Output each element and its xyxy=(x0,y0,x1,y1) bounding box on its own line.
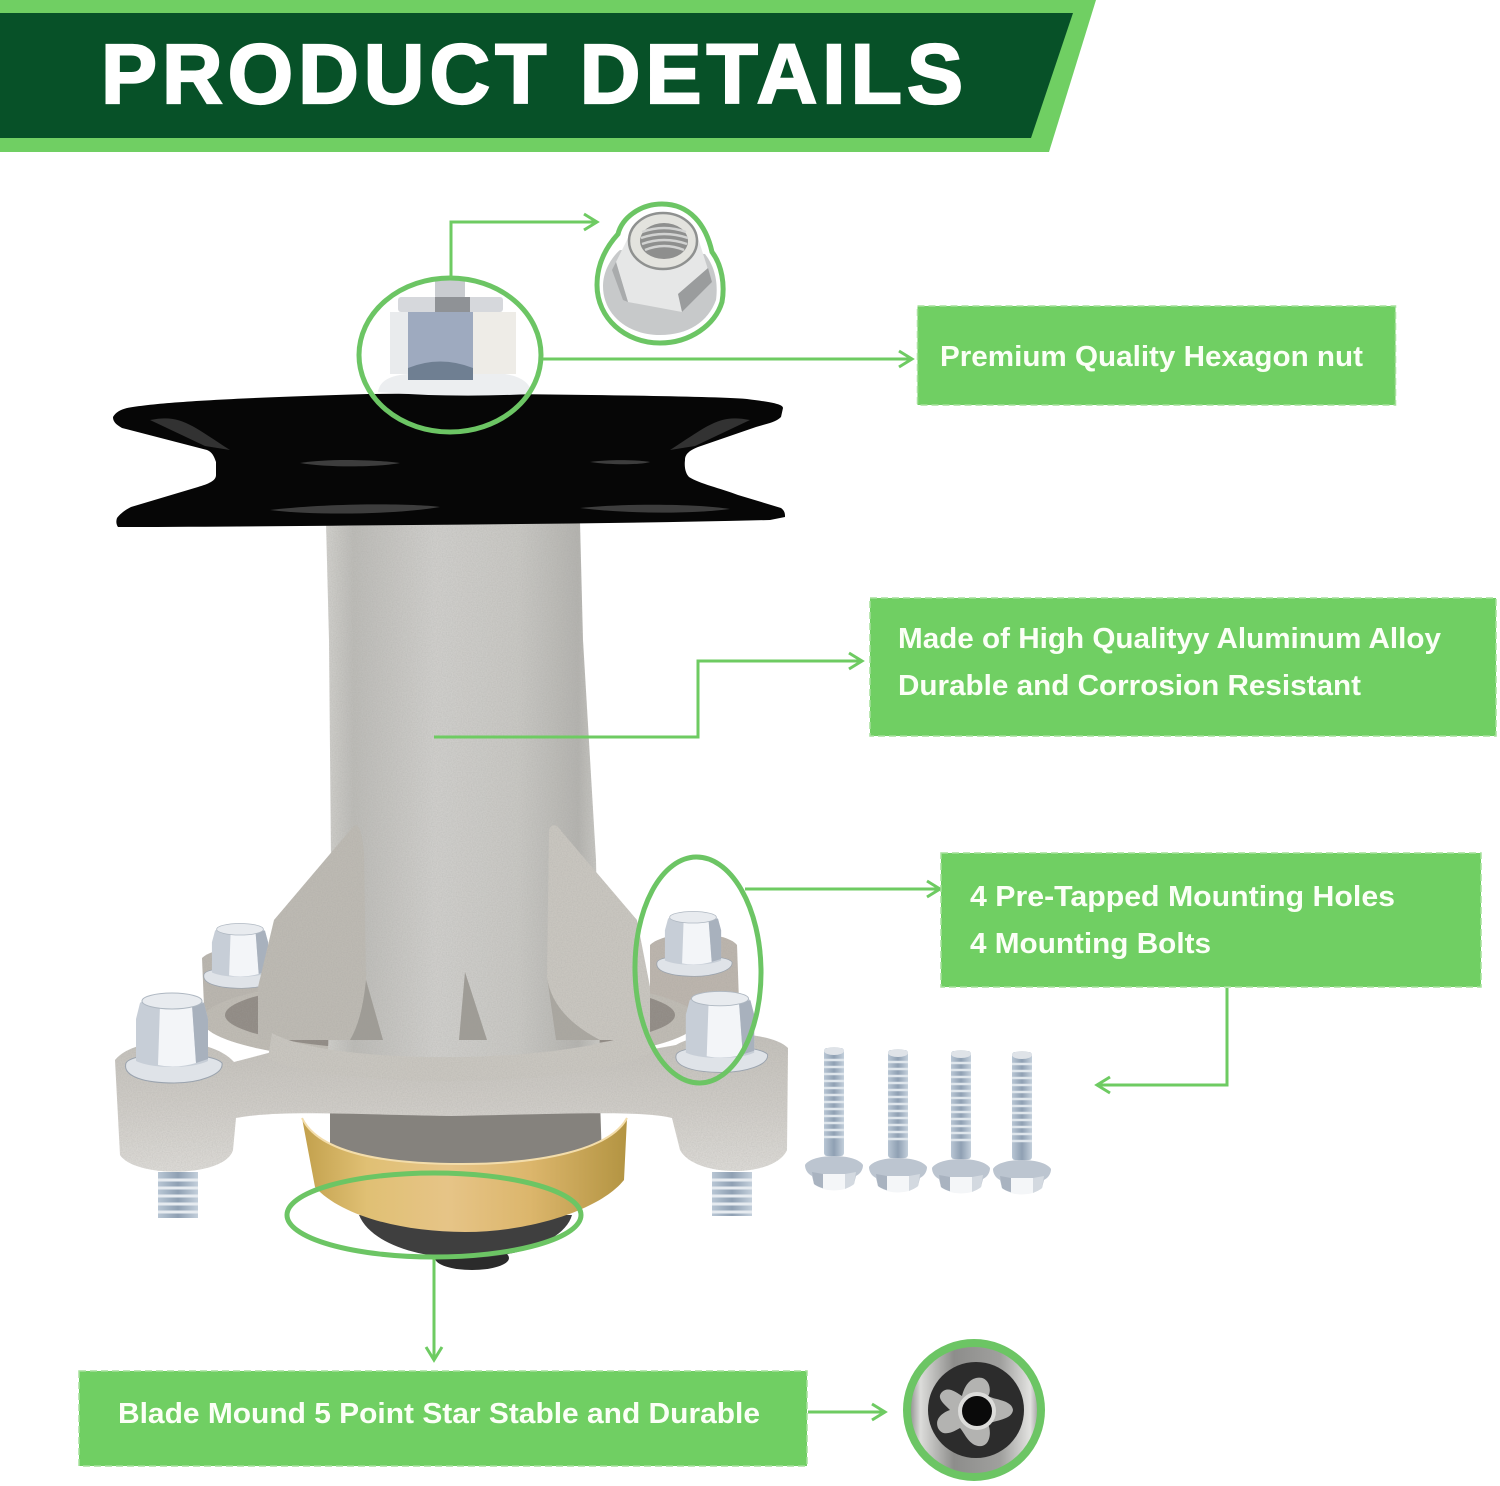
callout: aluminum alloy: Made of High Qualityy Aluminum Alloy xyxy=(898,623,1441,655)
callout: mounting holes xyxy=(941,853,1481,987)
spindle: studs xyxy=(158,1172,752,1218)
spindle: rear bolts xyxy=(204,912,732,988)
star socket xyxy=(937,1378,1013,1446)
arrow: hub nut to thumbnail xyxy=(451,214,597,278)
arrow: shaft to material label xyxy=(434,653,862,737)
highlight ring: hex nut xyxy=(359,278,541,432)
title text: PRODUCT DETAILS xyxy=(101,27,963,121)
arrow: label to star inset xyxy=(808,1404,885,1420)
callout: aluminum alloy xyxy=(870,598,1496,736)
spindle: front bolts xyxy=(126,991,768,1083)
four loose mounting bolts xyxy=(805,1047,1051,1194)
highlight ring: mounting holes xyxy=(633,856,763,1084)
flange nut thumbnail xyxy=(597,204,723,343)
callout: mounting holes: 4 Mounting Bolts xyxy=(970,928,1211,960)
hub nut xyxy=(378,277,532,396)
spindle: mounting base xyxy=(115,1034,788,1172)
spindle: gussets xyxy=(258,825,650,1040)
title banner xyxy=(0,0,1096,152)
callout: hexagon nut xyxy=(918,306,1396,405)
callout: mounting holes: 4 Pre-Tapped Mounting Holes xyxy=(970,881,1395,913)
pulley xyxy=(113,394,785,527)
spindle: cup washer xyxy=(302,1100,627,1232)
arrow: hub nut to label xyxy=(543,351,912,367)
pulley highlights xyxy=(150,418,750,514)
spindle: ring rib xyxy=(268,1028,652,1081)
arrow: blade mound to label xyxy=(426,1258,442,1360)
blade mount star inset xyxy=(907,1343,1041,1477)
spindle: rear bosses xyxy=(202,934,740,1065)
spindle: rubber seal and bolt end xyxy=(359,1215,572,1270)
callout: blade mound xyxy=(79,1371,807,1466)
arrow: mounting holes to label xyxy=(745,881,940,897)
arrow: label to loose bolts xyxy=(1097,988,1227,1093)
callout: blade mound: Blade Mound 5 Point Star Stable and Durable xyxy=(118,1398,760,1430)
spindle: aluminum shaft xyxy=(326,522,600,1060)
callout: aluminum alloy: Durable and Corrosion Resistant xyxy=(898,670,1361,702)
highlight ring: blade mound xyxy=(287,1173,581,1257)
callout: hexagon nut: Premium Quality Hexagon nut xyxy=(940,341,1363,373)
